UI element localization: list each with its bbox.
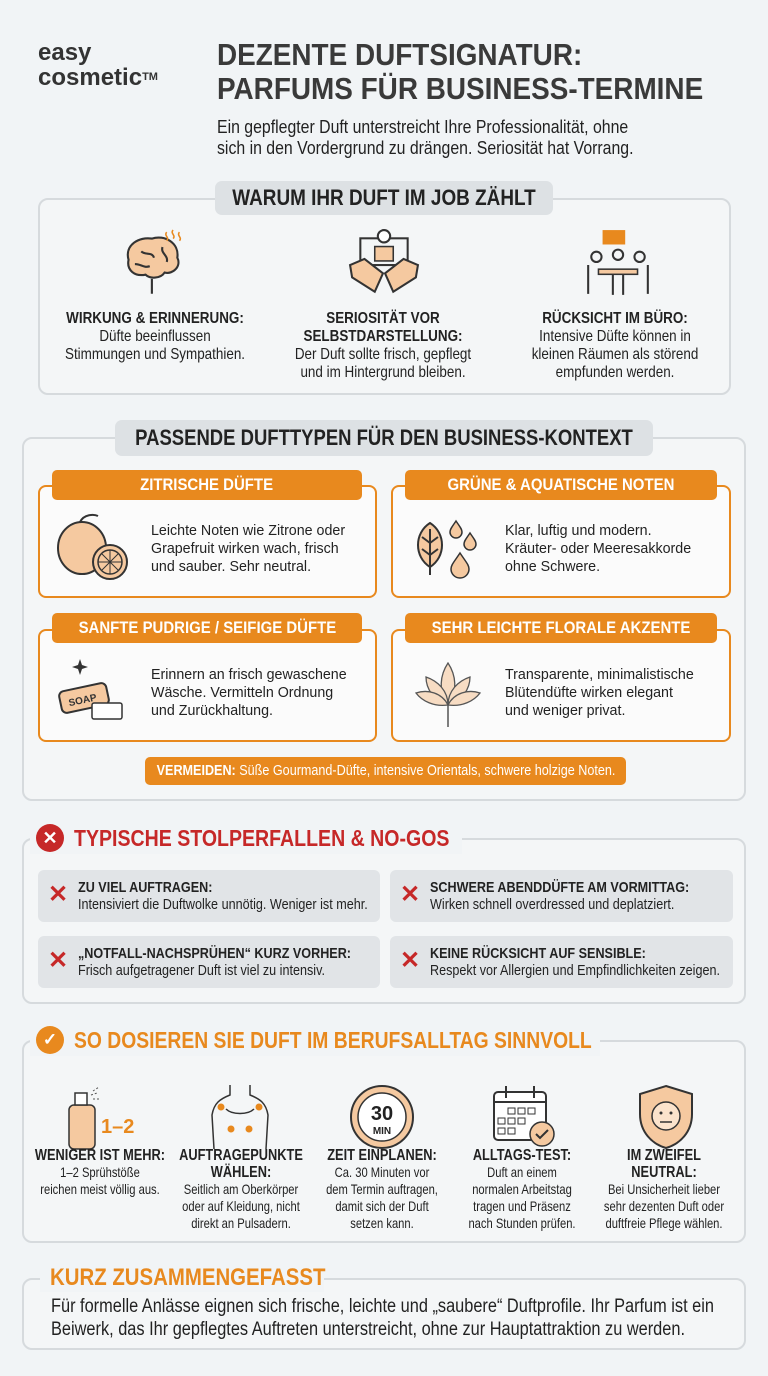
text: pudrige	[151, 666, 347, 719]
heading: zusammenfassung: KURZ ZUSAMMENGEFASST	[50, 1264, 325, 1291]
card heading: gruene	[405, 470, 717, 500]
text: summary: Beiwerk, das Ihr gepflegtes Auftreten unterstreicht, ohne zur Hauptattraktion zu werden.	[51, 1319, 685, 1340]
card heading: florale: SEHR LEICHTE FLORALE AKZENTE	[432, 618, 690, 637]
text: zitrische: Leichte Noten wie Zitrone oder	[151, 522, 345, 539]
icon: torso	[211, 1085, 269, 1149]
icon: flower	[415, 662, 481, 727]
text: summary: Für formelle Anlässe eignen sich frische, leichte und „saubere“ Duftprofile. Ihr Parfum ist ein	[51, 1296, 714, 1317]
text: florale: und weniger privat.	[505, 702, 625, 719]
panel: dufttypen	[22, 437, 746, 801]
item: abenddüfte: ✕	[400, 881, 420, 908]
text: summary	[51, 1296, 714, 1340]
panel: stolperfallen	[22, 838, 746, 1004]
text: gruene: Kräuter- oder Meeresakkorde	[505, 540, 691, 557]
heading: stolperfallen: TYPISCHE STOLPERFALLEN & NO-GOS	[74, 824, 449, 850]
card: florale	[391, 629, 731, 742]
text: alltagstest: tragen und Präsenz	[473, 1198, 571, 1214]
item: sensible: Respekt vor Allergien und Empfindlichkeiten zeigen.	[430, 962, 720, 979]
text: alltagstest	[468, 1147, 576, 1231]
text: zweifel: duftfreie Pflege wählen.	[605, 1215, 723, 1231]
text: alltagstest: ALLTAGS-TEST:	[473, 1147, 571, 1164]
panel: warum	[38, 198, 731, 395]
card heading: gruene: GRÜNE & AQUATISCHE NOTEN	[448, 475, 674, 494]
text: weniger: 1–2 Sprühstöße	[60, 1164, 140, 1180]
text: zeit	[326, 1147, 438, 1231]
text: wirkung: Düfte beeinflussen	[99, 328, 211, 345]
icon: lemon	[57, 514, 128, 580]
card: zitrische	[38, 485, 377, 598]
logo: easy	[38, 39, 91, 66]
card heading: zitrische	[52, 470, 362, 500]
text: wirkung: WIRKUNG & ERINNERUNG:	[66, 310, 244, 327]
text: alltagstest: nach Stunden prüfen.	[468, 1215, 576, 1231]
callout: vermeiden: VERMEIDEN: Süße Gourmand-Düfte, intensive Orientals, schwere holzige Noten.	[156, 762, 615, 779]
icon: 30 min timer: MIN	[373, 1126, 391, 1137]
icon: 30 min timer	[350, 1085, 414, 1149]
text: zweifel	[604, 1147, 724, 1231]
callout: vermeiden	[145, 757, 626, 785]
text: zitrische: Grapefruit wirken wach, frisch	[151, 540, 339, 557]
subtitle: sich in den Vordergrund zu drängen. Seriosität hat Vorrang.	[217, 138, 634, 158]
heading: dosieren: SO DOSIEREN SIE DUFT IM BERUFSALLTAG SINNVOLL	[74, 1026, 592, 1052]
text: gruene: ohne Schwere.	[505, 558, 600, 575]
text: wirkung: Stimmungen und Sympathien.	[65, 346, 245, 363]
card heading: pudrige	[52, 613, 362, 643]
text: pudrige: Wäsche. Vermitteln Ordnung	[151, 684, 333, 701]
item: abenddüfte: Wirken schnell overdressed und deplatziert.	[430, 896, 674, 913]
item: abenddüfte	[390, 870, 733, 922]
card heading: pudrige: SANFTE PUDRIGE / SEIFIGE DÜFTE	[78, 618, 336, 637]
subtitle	[217, 117, 634, 158]
text: pudrige: Erinnern an frisch gewaschene	[151, 666, 347, 683]
text: wirkung	[65, 310, 245, 363]
panel: dosieren	[22, 1040, 746, 1243]
text: seriositaet: und im Hintergrund bleiben.	[300, 364, 466, 381]
item: zu viel: ✕	[48, 881, 68, 908]
item: sensible: KEINE RÜCKSICHT AUF SENSIBLE:	[430, 945, 646, 962]
text: auftragepunkte: oder auf Kleidung, nicht	[182, 1198, 300, 1214]
card: pudrige	[38, 629, 377, 742]
text: seriositaet: SERIOSITÄT VOR	[326, 310, 440, 327]
heading: warum: WARUM IHR DUFT IM JOB ZÄHLT	[232, 185, 536, 210]
text: florale: Blütendüfte wirken elegant	[505, 684, 673, 701]
card: gruene	[391, 485, 731, 598]
panel: zusammenfassung	[22, 1278, 746, 1350]
text: florale: Transparente, minimalistische	[505, 666, 694, 683]
text: ruecksicht: empfunden werden.	[556, 364, 674, 381]
item: nachsprühen	[38, 936, 380, 988]
text: seriositaet	[295, 310, 471, 381]
icon: meeting	[587, 230, 649, 295]
text: zitrische: und sauber. Sehr neutral.	[151, 558, 311, 575]
text: weniger: reichen meist völlig aus.	[40, 1181, 160, 1197]
text: auftragepunkte	[179, 1147, 303, 1231]
text: pudrige: und Zurückhaltung.	[151, 702, 273, 719]
item: sensible	[390, 936, 733, 988]
text: weniger	[34, 1147, 165, 1197]
title: DEZENTE DUFTSIGNATUR:	[217, 37, 582, 72]
text: seriositaet: Der Duft sollte frisch, gepflegt	[295, 346, 471, 363]
text: zeit: Ca. 30 Minuten vor	[335, 1164, 429, 1180]
title	[217, 37, 703, 106]
text: ruecksicht: RÜCKSICHT IM BÜRO:	[542, 310, 688, 327]
icon: check	[36, 1026, 64, 1054]
icon: shield	[639, 1085, 693, 1149]
item: zu viel	[38, 870, 380, 922]
item: sensible: ✕	[400, 947, 420, 974]
icon: soap: SOAP	[68, 692, 98, 709]
text: ruecksicht	[532, 309, 698, 381]
text: zweifel: sehr dezenten Duft oder	[604, 1198, 724, 1214]
text: auftragepunkte: Seitlich am Oberkörper	[184, 1181, 298, 1197]
text: weniger: WENIGER IST MEHR:	[35, 1147, 165, 1164]
item: abenddüfte: SCHWERE ABENDDÜFTE AM VORMITTAG:	[430, 879, 689, 896]
logo: cosmeticTM	[38, 64, 158, 91]
text: ruecksicht: Intensive Düfte können in	[539, 328, 691, 345]
card heading: zitrische: ZITRISCHE DÜFTE	[141, 475, 273, 494]
text: zitrische	[151, 522, 345, 575]
icon: spray: 1–2	[101, 1116, 134, 1138]
item: nachsprühen: ✕	[48, 947, 68, 974]
text: auftragepunkte: AUFTRAGEPUNKTE	[179, 1147, 303, 1164]
item: zu viel: ZU VIEL AUFTRAGEN:	[78, 879, 212, 896]
icon: handshake	[348, 229, 420, 294]
item: zu viel: Intensiviert die Duftwolke unnötig. Weniger ist mehr.	[78, 896, 368, 913]
text: zweifel: IM ZWEIFEL	[627, 1147, 701, 1164]
text: gruene: Klar, luftig und modern.	[505, 522, 652, 539]
item: nachsprühen: Frisch aufgetragener Duft ist viel zu intensiv.	[78, 962, 325, 979]
title: PARFUMS FÜR BUSINESS-TERMINE	[217, 71, 703, 106]
text: florale	[505, 666, 694, 719]
text: zeit: ZEIT EINPLANEN:	[327, 1147, 437, 1164]
icon: 30 min timer: 30	[371, 1103, 393, 1125]
icon: calendar	[493, 1086, 555, 1147]
heading: warum	[215, 181, 553, 215]
text: zweifel: NEUTRAL:	[631, 1164, 697, 1181]
text: zweifel: Bei Unsicherheit lieber	[608, 1181, 720, 1197]
icon: soap	[58, 659, 123, 720]
text: zeit: damit sich der Duft	[335, 1198, 429, 1214]
text: gruene	[505, 522, 691, 575]
icon: leaf drops	[417, 520, 477, 579]
icon: red x	[36, 824, 64, 852]
heading: dufttypen: PASSENDE DUFTTYPEN FÜR DEN BUSINESS-KONTEXT	[135, 425, 633, 450]
text: zeit: dem Termin auftragen,	[326, 1181, 438, 1197]
heading: dufttypen	[115, 420, 653, 456]
item: nachsprühen: „NOTFALL-NACHSPRÜHEN“ KURZ VORHER:	[78, 945, 351, 962]
card heading: florale	[405, 613, 717, 643]
logo	[38, 39, 158, 91]
text: auftragepunkte: WÄHLEN:	[211, 1164, 271, 1181]
icon: spray	[68, 1087, 134, 1150]
text: alltagstest: Duft an einem	[487, 1164, 557, 1180]
text: alltagstest: normalen Arbeitstag	[472, 1181, 572, 1197]
icon: brain	[126, 230, 182, 294]
text: seriositaet: SELBSTDARSTELLUNG:	[303, 328, 463, 345]
subtitle: Ein gepflegter Duft unterstreicht Ihre Professionalität, ohne	[217, 117, 628, 137]
text: auftragepunkte: direkt an Pulsadern.	[191, 1215, 291, 1231]
icon: red x: ✕	[42, 828, 58, 848]
icon: check: ✓	[43, 1030, 57, 1049]
text: zeit: setzen kann.	[350, 1215, 414, 1231]
text: ruecksicht: kleinen Räumen als störend	[532, 346, 698, 363]
